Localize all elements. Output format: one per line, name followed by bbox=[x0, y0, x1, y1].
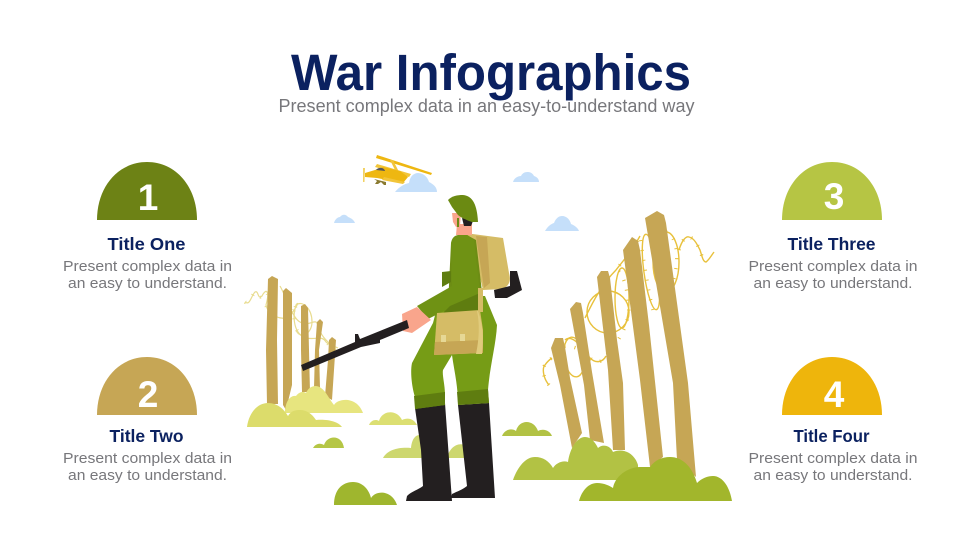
badge 2: 2 bbox=[138, 374, 158, 415]
badge 2 bbox=[97, 357, 197, 415]
description two bbox=[63, 450, 232, 484]
icon: biplane bbox=[363, 155, 432, 185]
right bushes bbox=[502, 422, 732, 501]
satchel bbox=[434, 288, 483, 355]
panel: title four bbox=[748, 357, 918, 484]
rifle stock bbox=[494, 271, 522, 298]
heading two: Title Two bbox=[110, 426, 184, 446]
heading one: Title One bbox=[108, 234, 186, 254]
rifle bbox=[301, 320, 409, 371]
right barbed wire bbox=[543, 232, 714, 385]
description three: Present complex data in bbox=[748, 258, 918, 275]
panel: title two bbox=[63, 357, 232, 484]
badge 4 bbox=[782, 357, 882, 415]
badge 1 bbox=[97, 162, 197, 220]
rucksack bbox=[465, 233, 510, 290]
description three bbox=[748, 258, 918, 292]
left bushes bbox=[247, 386, 467, 505]
left fence posts bbox=[266, 276, 336, 410]
description four bbox=[748, 450, 918, 484]
neck and face bbox=[452, 213, 472, 235]
description two: an easy to understand. bbox=[68, 467, 227, 484]
torso and arm bbox=[417, 234, 482, 319]
description one: an easy to understand. bbox=[68, 275, 227, 292]
subtitle: Present complex data in an easy-to-understand way bbox=[278, 96, 694, 116]
panel: title one bbox=[63, 162, 232, 292]
hair bbox=[462, 218, 473, 226]
heading three: Title Three bbox=[788, 234, 876, 254]
soldier figure bbox=[301, 195, 522, 501]
description four: an easy to understand. bbox=[754, 467, 912, 484]
panel: title three bbox=[748, 162, 918, 292]
badge 4: 4 bbox=[824, 374, 845, 415]
description two: Present complex data in bbox=[63, 450, 232, 467]
clouds bbox=[334, 172, 579, 231]
description three: an easy to understand. bbox=[754, 275, 912, 292]
helmet bbox=[448, 195, 478, 227]
boots bbox=[406, 403, 495, 501]
heading four: Title Four bbox=[794, 426, 870, 446]
right fence posts bbox=[551, 211, 696, 477]
left barbed wire bbox=[245, 286, 338, 350]
badge 1: 1 bbox=[138, 177, 158, 218]
badge 3 bbox=[782, 162, 882, 220]
trousers bbox=[411, 296, 497, 409]
hand bbox=[402, 307, 431, 333]
description one bbox=[63, 258, 232, 292]
description one: Present complex data in bbox=[63, 258, 232, 275]
title: War Infographics bbox=[291, 44, 691, 101]
badge 3: 3 bbox=[824, 176, 844, 217]
description four: Present complex data in bbox=[748, 450, 918, 467]
